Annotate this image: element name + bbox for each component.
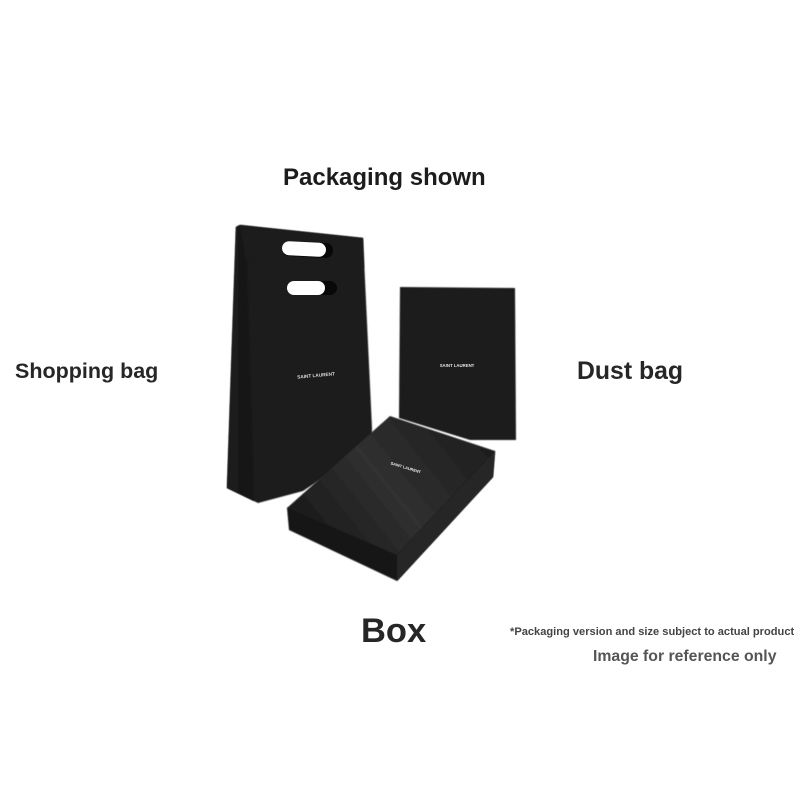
title: Packaging shown [283, 164, 486, 191]
upper handle cutout [282, 241, 333, 258]
icon: shopping bag [227, 225, 372, 503]
label: shopping bag: Shopping bag [15, 359, 158, 383]
lower handle cutout [287, 281, 337, 295]
icon: dust bag [399, 287, 516, 440]
icon: shopping bag: SAINT LAURENT [297, 371, 335, 380]
footnote: image reference: Image for reference only [593, 648, 776, 665]
icon: box [287, 416, 495, 581]
icon: dust bag: SAINT LAURENT [440, 363, 475, 368]
icon: box: SAINT LAURENT [390, 461, 422, 475]
label: box: Box [361, 612, 426, 650]
label: dust bag: Dust bag [577, 358, 683, 385]
footnote: packaging disclaimer: *Packaging version and size subject to actual product [510, 626, 794, 638]
